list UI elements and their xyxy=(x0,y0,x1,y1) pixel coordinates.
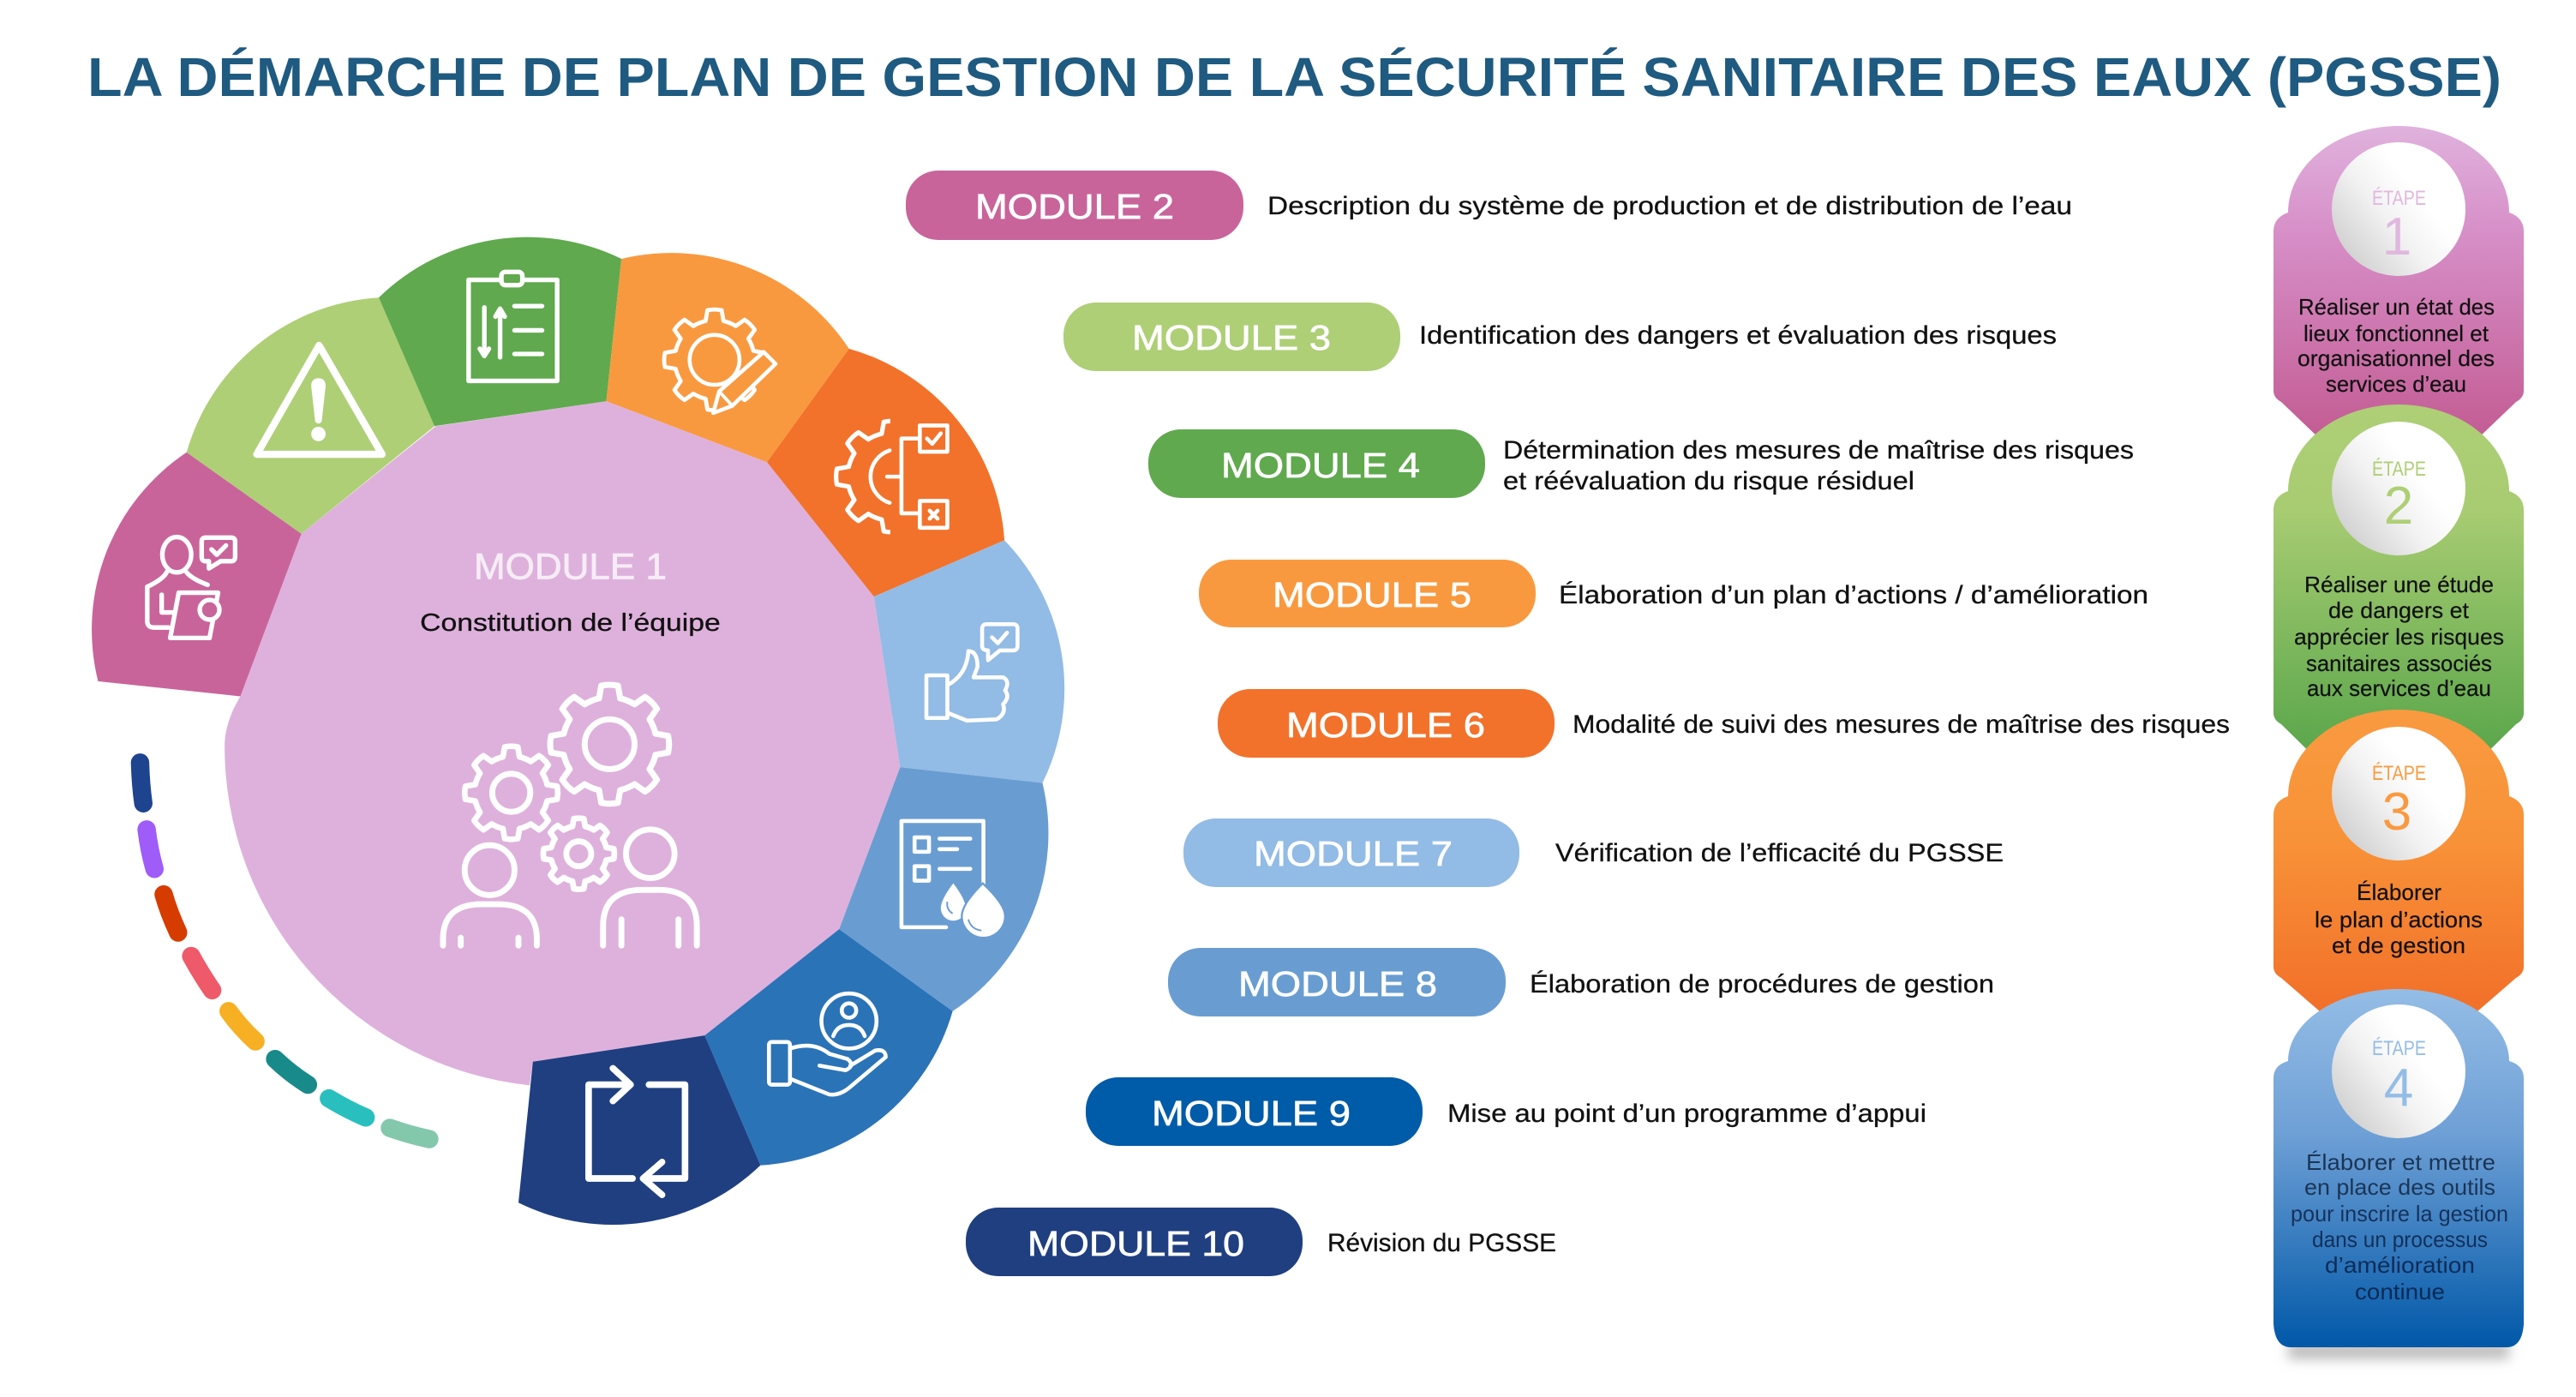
icon: half gear with decision boxes xyxy=(836,421,948,532)
module 2 pill xyxy=(906,171,1243,240)
central circle module 1 xyxy=(225,401,900,1085)
module 4 label: MODULE 4 xyxy=(1221,446,1420,485)
icon: warning triangle xyxy=(257,345,382,454)
étape 3 text: Élaborer xyxy=(2357,879,2441,905)
module 6 row xyxy=(1218,689,2230,758)
segment module 10 xyxy=(518,1035,760,1225)
module 3 row xyxy=(1063,303,2057,371)
module 9 row xyxy=(1086,1077,1926,1146)
module 10 pill xyxy=(966,1208,1303,1276)
module 6 label: MODULE 6 xyxy=(1286,705,1485,745)
module 9 pill xyxy=(1086,1077,1423,1146)
étape 2 text: sanitaires associés xyxy=(2306,651,2492,676)
étape 3 text xyxy=(2315,879,2483,958)
module 4 description: et réévaluation du risque résiduel xyxy=(1503,467,1914,495)
panel: étape 4 xyxy=(2273,989,2524,1359)
étape 4 shadow xyxy=(2288,1342,2509,1359)
étape 1 number: 1 xyxy=(2382,207,2411,267)
segment module 4 xyxy=(379,237,621,426)
module 3 description: Identification des dangers et évaluation des risques xyxy=(1419,321,2057,350)
circular module diagram xyxy=(92,237,1064,1225)
module 2 description: Description du système de production et de distribution de l’eau xyxy=(1267,192,2072,220)
title: LA DÉMARCHE DE PLAN DE GESTION DE LA SÉCURITÉ SANITAIRE DES EAUX (PGSSE) xyxy=(87,46,2501,108)
étape 2 text xyxy=(2294,572,2504,701)
étape 2 text: aux services d’eau xyxy=(2307,675,2491,701)
étape 3 text: et de gestion xyxy=(2332,932,2465,958)
module 6 pill xyxy=(1218,689,1555,758)
étape 1 label: ÉTAPE xyxy=(2372,187,2426,210)
module 7 description: Vérification de l’efficacité du PGSSE xyxy=(1555,839,2004,867)
module 3 label: MODULE 3 xyxy=(1132,318,1331,357)
module 5 label: MODULE 5 xyxy=(1273,575,1471,615)
panel: étape 2 xyxy=(2273,405,2524,840)
segment module 3 xyxy=(187,297,434,534)
étape 4 text xyxy=(2291,1149,2508,1304)
segment module 5 xyxy=(607,253,849,462)
étape 1 text: lieux fonctionnel et xyxy=(2303,321,2489,346)
module 3 pill xyxy=(1063,303,1400,371)
panel: étape 1 xyxy=(2273,126,2524,514)
icon: person with tablet and speech bubble xyxy=(147,537,235,638)
module 7 pill xyxy=(1183,818,1519,887)
module 10 description: Révision du PGSSE xyxy=(1327,1229,1556,1257)
étape 1 shape xyxy=(2273,126,2524,514)
module 8 row xyxy=(1168,948,1994,1016)
segment module 7 xyxy=(874,540,1064,783)
icon: loop arrows xyxy=(589,1068,685,1195)
segment module 9 xyxy=(704,929,953,1166)
étape 2 number: 2 xyxy=(2384,477,2413,536)
module 8 description: Élaboration de procédures de gestion xyxy=(1530,970,1994,998)
segment module 2 xyxy=(92,453,302,696)
module 2 label: MODULE 2 xyxy=(975,187,1174,226)
icon: thumbs up xyxy=(926,624,1017,721)
module 5 pill xyxy=(1199,560,1536,627)
icon: team and gears xyxy=(443,685,697,945)
module 9 description: Mise au point d’un programme d’appui xyxy=(1447,1100,1926,1128)
étape 3 number: 3 xyxy=(2382,782,2411,842)
étape 2 text: apprécier les risques xyxy=(2294,624,2504,650)
module 10 row xyxy=(966,1208,1556,1276)
module 9 label: MODULE 9 xyxy=(1152,1094,1351,1133)
module 1 label: MODULE 1 xyxy=(474,547,667,588)
étape 2 text: Réaliser une étude xyxy=(2304,572,2494,597)
étape 2 badge xyxy=(2332,422,2465,555)
icon: gear with pencil xyxy=(664,309,776,413)
module 4 row xyxy=(1148,429,2134,498)
module 4 description: Détermination des mesures de maîtrise des risques xyxy=(1503,436,2134,465)
module 5 description: Élaboration d’un plan d’actions / d’amélioration xyxy=(1559,581,2148,609)
module 10 label: MODULE 10 xyxy=(1027,1224,1244,1263)
icon: hand holding person xyxy=(769,993,886,1094)
étape 4 text: dans un processus xyxy=(2312,1226,2488,1252)
étape 4 text: Élaborer et mettre xyxy=(2306,1149,2495,1175)
module 8 pill xyxy=(1168,948,1506,1016)
module 2 row xyxy=(906,171,2072,240)
étape 1 text: Réaliser un état des xyxy=(2298,294,2495,320)
étape 3 badge xyxy=(2332,727,2465,860)
étape 4 label: ÉTAPE xyxy=(2372,1037,2426,1060)
module 6 description: Modalité de suivi des mesures de maîtrise des risques xyxy=(1573,710,2230,739)
segment module 8 xyxy=(839,767,1048,1011)
étape 4 text: pour inscrire la gestion xyxy=(2291,1201,2508,1226)
étape 4 shape xyxy=(2273,989,2524,1347)
étape 4 text: en place des outils xyxy=(2304,1174,2495,1200)
étape 2 text: de dangers et xyxy=(2328,597,2470,623)
dashed colored arc xyxy=(140,763,429,1139)
étape 3 shape xyxy=(2273,710,2524,1080)
module 4 description xyxy=(1503,436,2134,495)
module 7 row xyxy=(1183,818,2004,887)
étape 3 label: ÉTAPE xyxy=(2372,762,2426,785)
module 5 row xyxy=(1199,560,2148,627)
étape 1 text xyxy=(2297,294,2495,397)
étape 1 text: services d’eau xyxy=(2326,371,2466,397)
étape 3 text: le plan d’actions xyxy=(2315,907,2483,932)
segment module 6 xyxy=(767,349,1004,597)
étape 4 text: d’amélioration xyxy=(2325,1252,2475,1278)
panel: étape 3 xyxy=(2273,710,2524,1080)
étape 1 text: organisationnel des xyxy=(2297,345,2495,371)
module 7 label: MODULE 7 xyxy=(1254,834,1453,873)
étape 4 text: continue xyxy=(2355,1279,2445,1304)
icon: checklist with water drops xyxy=(902,821,1005,938)
étape 2 shape xyxy=(2273,405,2524,840)
étape 4 badge xyxy=(2332,1004,2465,1138)
étape 1 badge xyxy=(2332,142,2465,276)
module 4 pill xyxy=(1148,429,1485,498)
module 1 description: Constitution de l’équipe xyxy=(420,609,721,637)
module 8 label: MODULE 8 xyxy=(1238,964,1437,1004)
étape 2 label: ÉTAPE xyxy=(2372,458,2426,481)
icon: clipboard xyxy=(469,272,557,381)
étape 4 number: 4 xyxy=(2384,1058,2413,1118)
